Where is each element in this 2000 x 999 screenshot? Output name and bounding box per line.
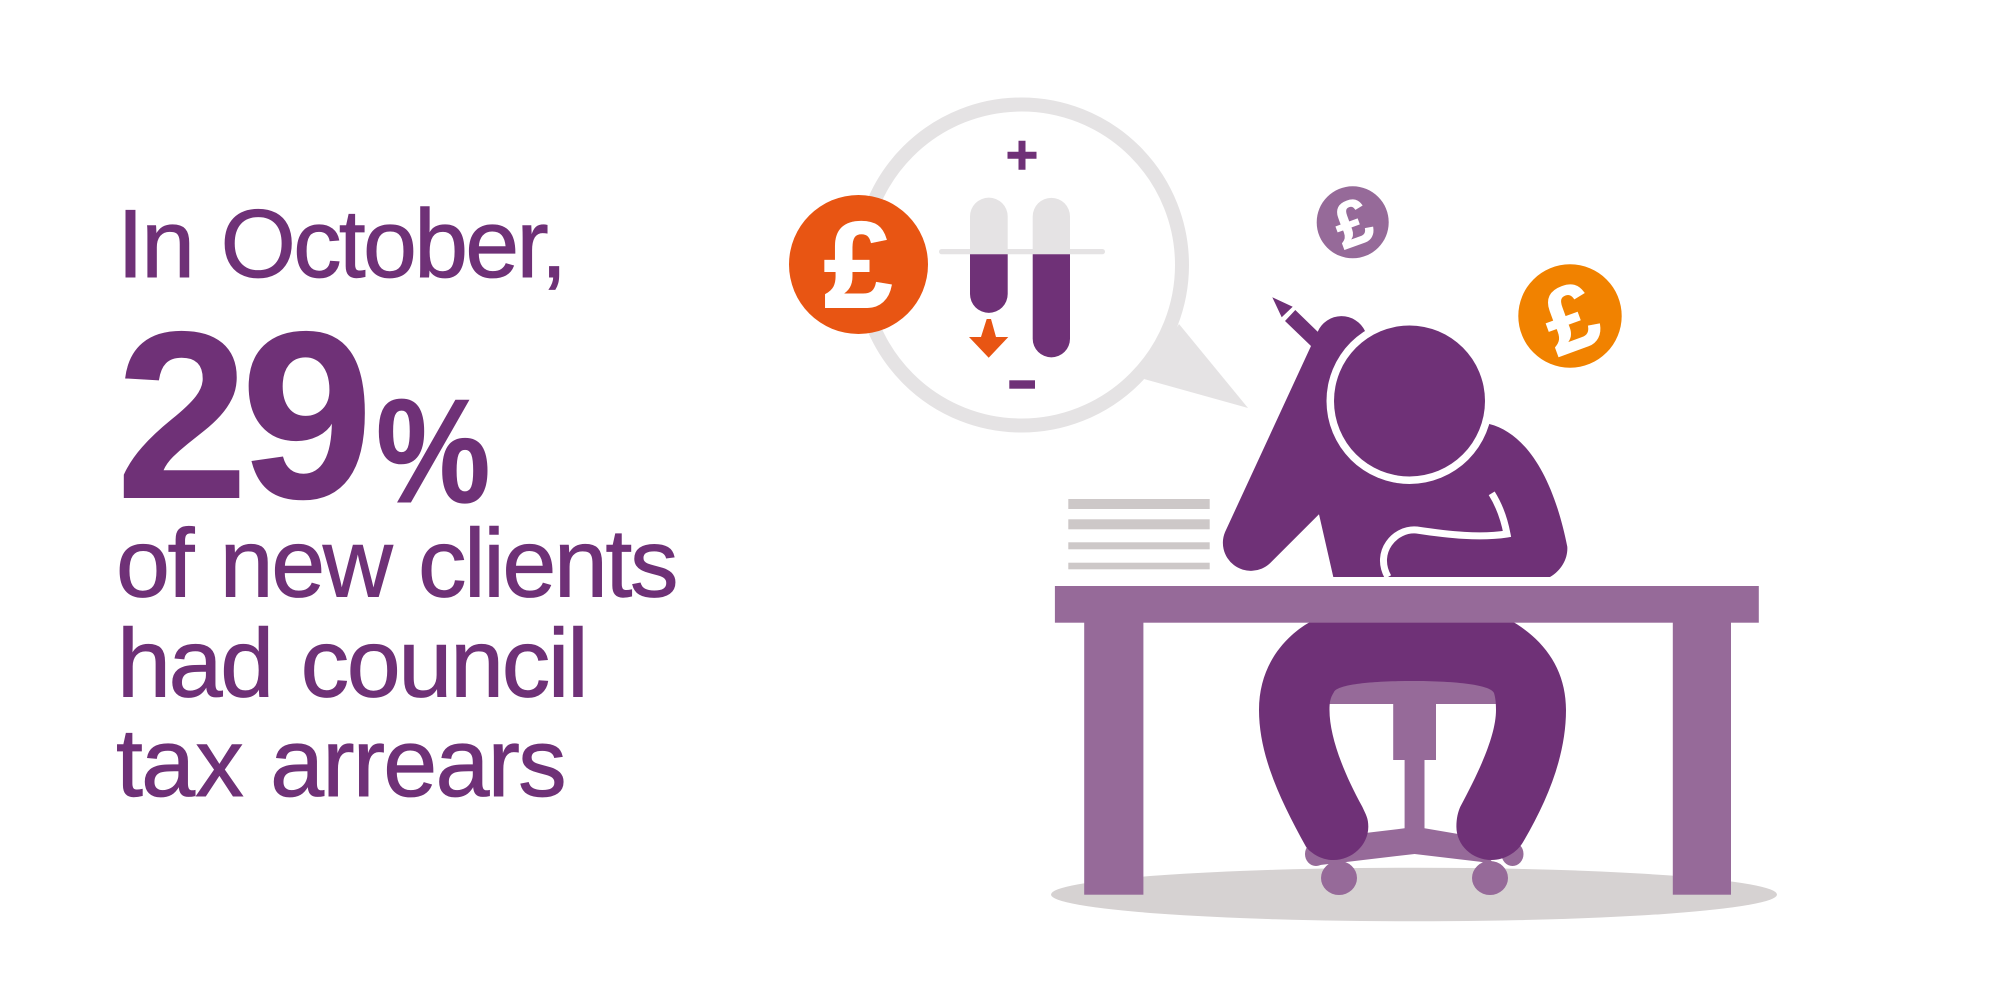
plus sign [1008,141,1036,170]
coin: large orange pound: £ [824,197,892,333]
percent sign: % [376,369,491,534]
left tube upper [970,198,1008,254]
right tube lower [1033,254,1070,357]
paper stack lines [1068,499,1210,569]
desk left leg [1084,622,1143,895]
stool [1305,681,1524,895]
coin: amber pound: £ [1530,262,1613,375]
big number: 29: 29 [116,284,366,548]
line: had council: had council [117,608,586,718]
bubble ring [861,104,1182,426]
arrow: down [969,319,1008,358]
minus sign [1009,380,1035,389]
line: tax arrears: tax arrears [116,708,565,817]
stool back wheels [1305,842,1327,866]
desk [1055,586,1759,895]
right tube upper [1033,198,1070,254]
level line [939,249,1105,254]
person: legs [1259,620,1566,860]
person: torso and raised arm [1223,297,1567,577]
coin: large orange pound [789,195,928,334]
speech bubble [861,104,1248,426]
stool base [1320,681,1501,865]
line: In October: In October, [117,189,565,298]
pencil tip [1272,297,1293,317]
head ring [1326,318,1492,484]
arm outline [1383,493,1507,577]
left tube lower [970,254,1008,313]
line: of new clients: of new clients [116,508,676,618]
text block: headline statistic [116,189,676,817]
coin: purple pound: £ [1324,183,1382,263]
chart: two tubes with level line [939,141,1105,389]
head [1334,326,1485,476]
floor shadow [1051,868,1777,921]
desk top [1055,586,1759,623]
desk right leg [1673,622,1731,895]
torso with arm and pencil [1223,310,1567,577]
stool front wheels [1321,861,1357,895]
bubble tail [1144,324,1248,408]
